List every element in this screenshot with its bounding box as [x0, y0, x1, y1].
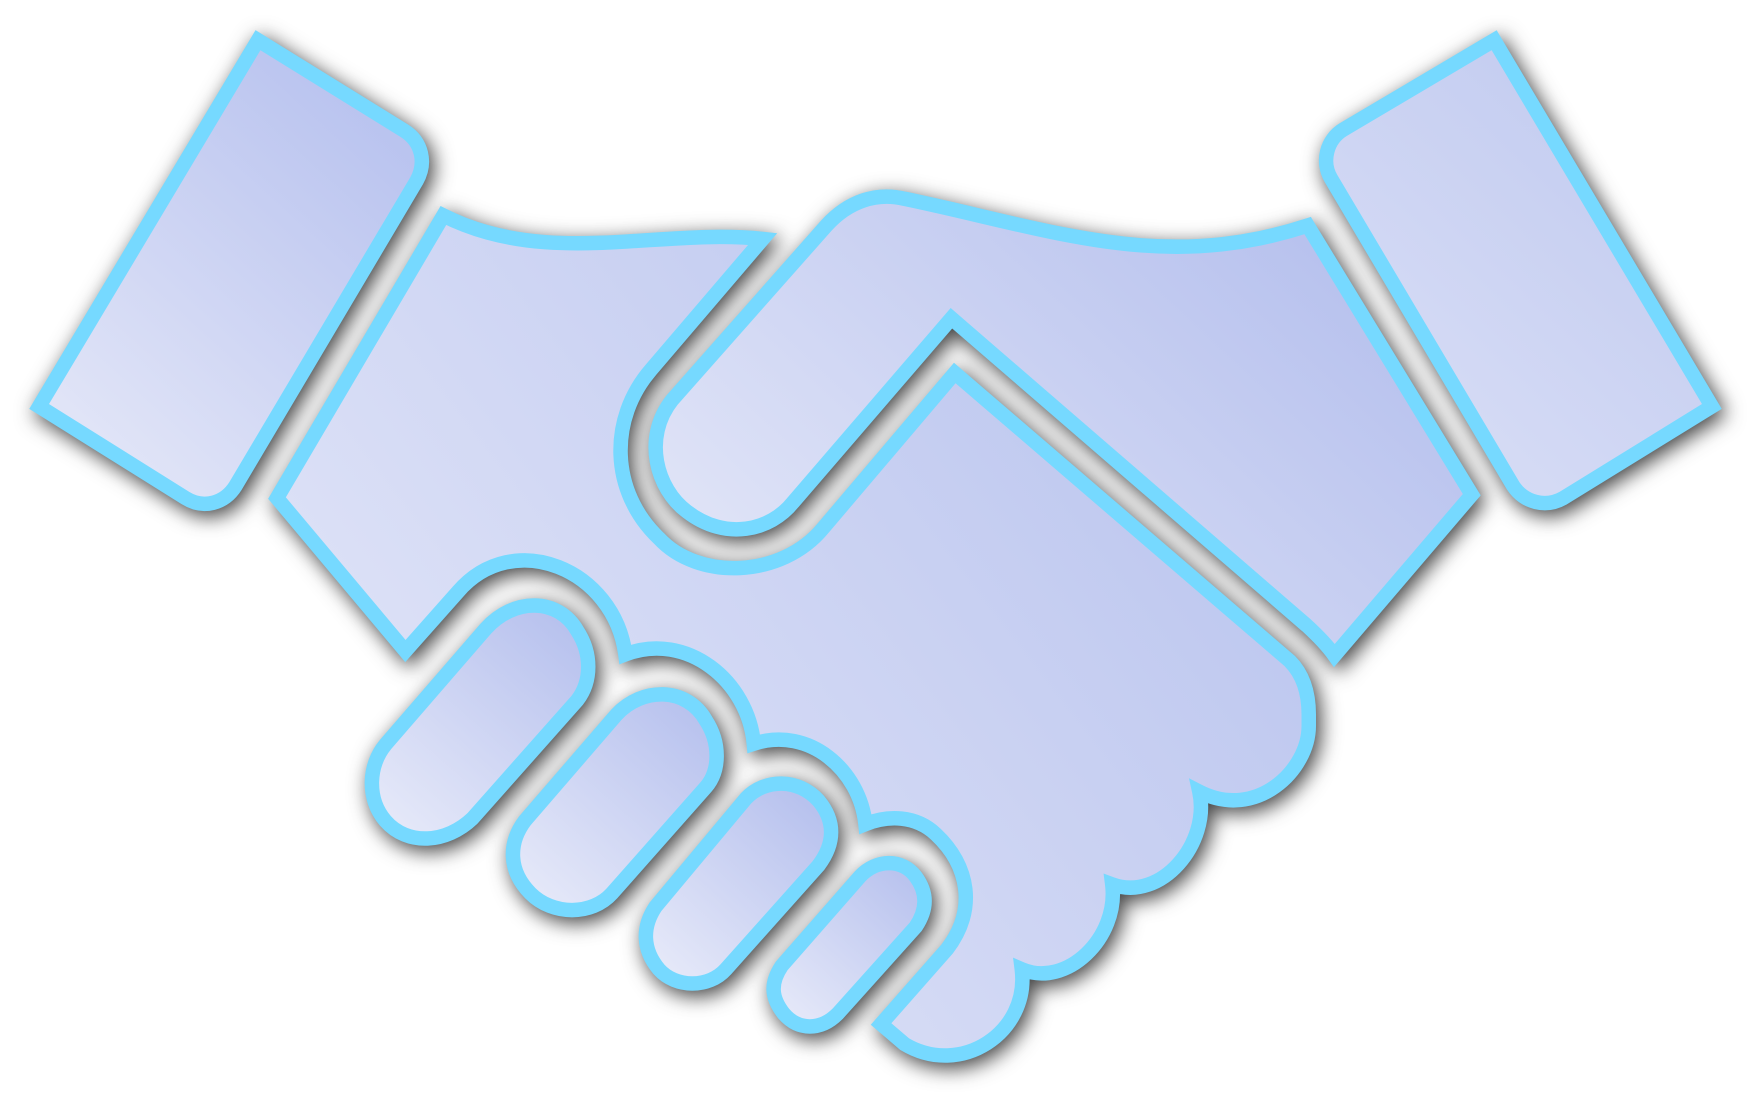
right cuff — [1326, 40, 1712, 503]
right hand — [656, 197, 1472, 655]
left cuff — [39, 40, 422, 504]
finger 3 — [646, 784, 831, 983]
finger 1 — [372, 605, 588, 839]
finger 2 — [513, 694, 717, 910]
finger 4 — [774, 863, 924, 1026]
left hand — [277, 216, 1309, 1056]
